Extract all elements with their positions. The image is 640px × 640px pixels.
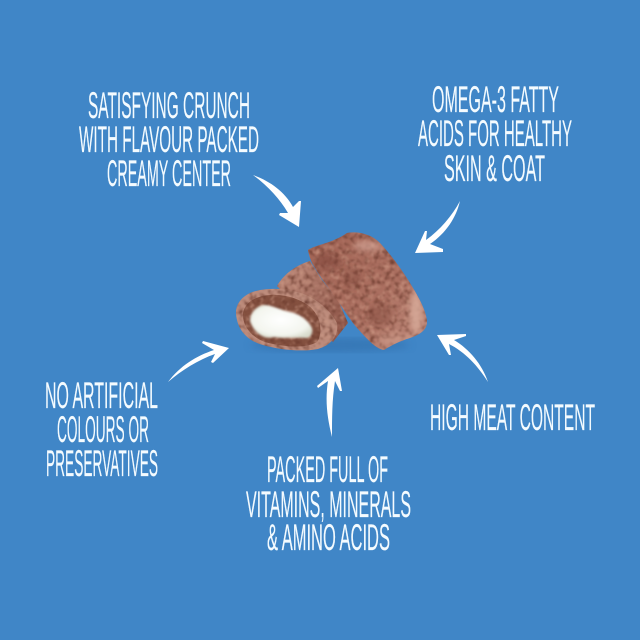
- text: no artificial colours: [45, 375, 158, 484]
- infographic canvas: PACKED FULL OF: [267, 449, 388, 490]
- callout: high meat content: [430, 334, 595, 438]
- callout: vitamins: [246, 368, 411, 558]
- middle kibble: [277, 261, 348, 342]
- text: omega-3: [418, 79, 572, 189]
- callout: no artificial colours: COLOURS OR: [57, 409, 149, 450]
- callout: satisfying crunch: [79, 85, 301, 227]
- right kibble: [308, 232, 427, 350]
- text: satisfying crunch: [79, 85, 259, 194]
- outer crust: [236, 289, 337, 350]
- callout: no artificial colours: PRESERVATIVES: [46, 443, 158, 484]
- arrow: towards treat from top right: [415, 201, 460, 253]
- arrow: towards treat from right: [437, 334, 488, 382]
- front kibble, cut open: [236, 289, 337, 350]
- text: vitamins: & AMINO ACIDS: [267, 517, 390, 558]
- infographic canvas: [46, 86, 595, 550]
- infographic canvas: VITAMINS, MINERALS: [246, 484, 411, 525]
- text: vitamins: [246, 449, 411, 558]
- callout: no artificial colours: NO ARTIFICIAL: [45, 375, 158, 416]
- crust shading: [316, 241, 422, 345]
- callout: satisfying crunch: WITH FLAVOUR PACKED: [79, 119, 259, 160]
- kibble shadow: [250, 338, 410, 352]
- product image: filled kibble treats: [236, 232, 427, 352]
- cream filling: [250, 305, 312, 338]
- arrow: towards treat from below: [317, 368, 342, 437]
- callout: omega-3: [415, 79, 572, 253]
- callout: no artificial colours: [45, 341, 229, 484]
- callout: satisfying crunch: SATISFYING CRUNCH: [88, 85, 250, 126]
- callout: satisfying crunch: CREAMY CENTER: [107, 153, 231, 194]
- inner brown ring: [243, 295, 320, 347]
- arrow: towards treat from top left: [253, 175, 301, 227]
- arrow: towards treat from left: [168, 341, 229, 382]
